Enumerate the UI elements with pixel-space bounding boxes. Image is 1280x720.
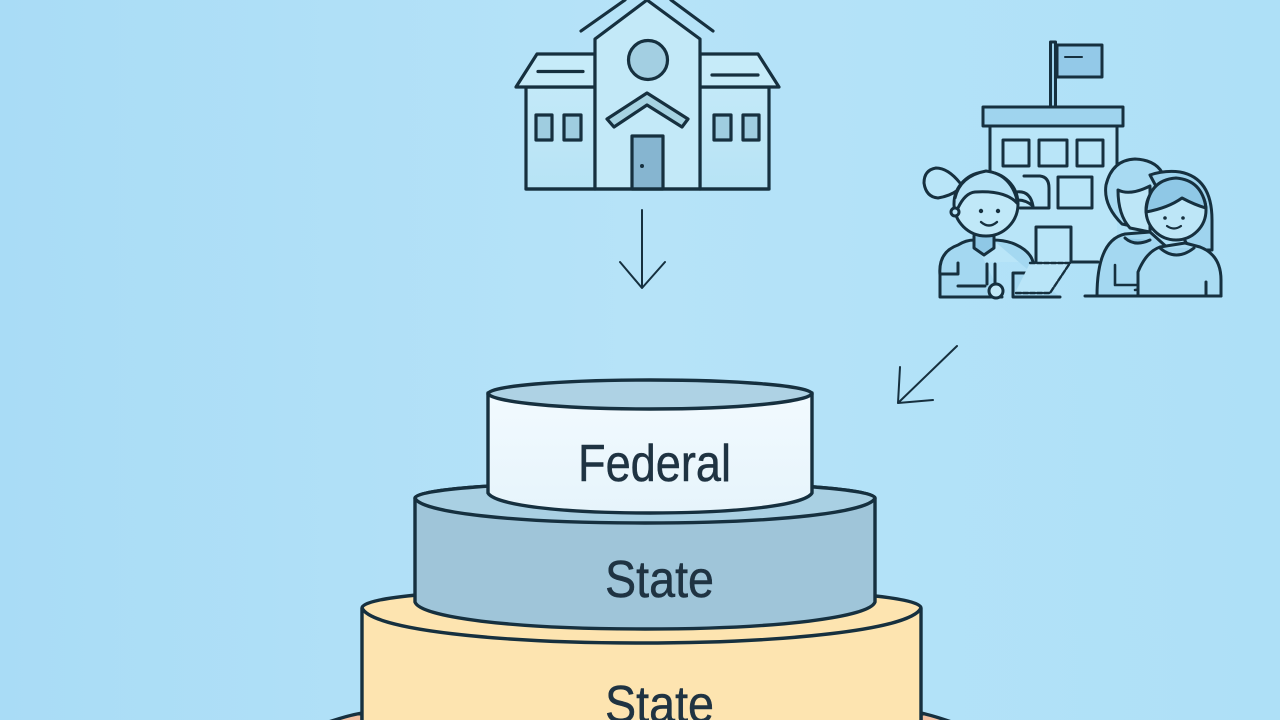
arrow: community down to tiers [898, 346, 957, 403]
child with pigtails [924, 168, 1070, 298]
label: Federal: Federal [578, 435, 731, 493]
tier 4: bottom salmon tier [320, 713, 960, 720]
tier 2: state level [415, 482, 875, 629]
icon: community school with children and parents [924, 42, 1221, 298]
parent at the front [1085, 171, 1221, 296]
tiered government diagram [320, 380, 960, 720]
flag and pole [1050, 42, 1102, 106]
arrow: school down to tiers [620, 210, 665, 288]
tier 1: federal level [488, 380, 812, 513]
tier 3: local level [362, 588, 921, 720]
label: State upper tier: State [605, 551, 714, 609]
icon: school building [516, 0, 779, 189]
school block [983, 107, 1123, 262]
parent at the back [1097, 159, 1170, 296]
